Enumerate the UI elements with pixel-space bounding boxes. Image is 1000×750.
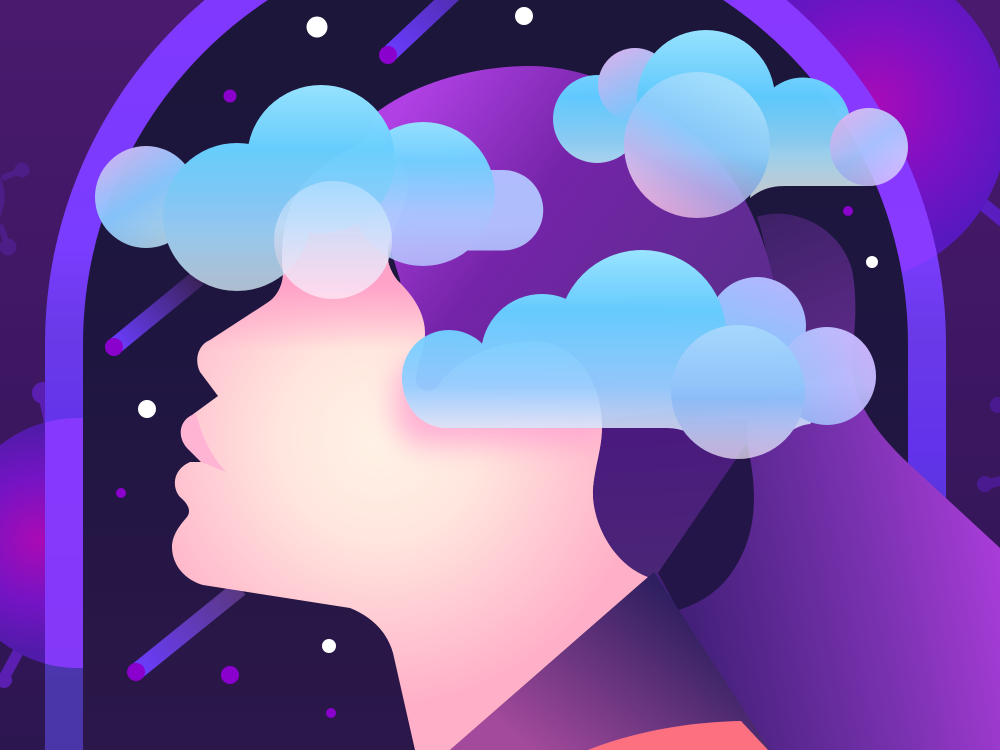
meteor heads and stars (105, 7, 878, 718)
arch: glow where viruses pass behind (45, 0, 937, 668)
cloud: left (95, 85, 543, 299)
virus: right edge spikes (977, 397, 1000, 492)
meteor: left (115, 278, 198, 346)
cloud: lower (402, 250, 876, 459)
meteor: top (388, 0, 470, 55)
hair: shadowed lock (658, 443, 754, 610)
virus: upper left (0, 151, 29, 255)
chest garment (450, 572, 770, 750)
meteor: lower (136, 588, 240, 672)
face and neck (172, 223, 648, 750)
hair: back lock (757, 214, 855, 440)
cloud: upper right (553, 30, 908, 218)
collar (588, 721, 768, 750)
virus: upper right (682, 0, 1000, 283)
hair: crown (360, 66, 790, 440)
hair: lock behind neck (593, 420, 747, 577)
shoulder and back (600, 365, 1000, 750)
virus: lower left (0, 382, 203, 688)
